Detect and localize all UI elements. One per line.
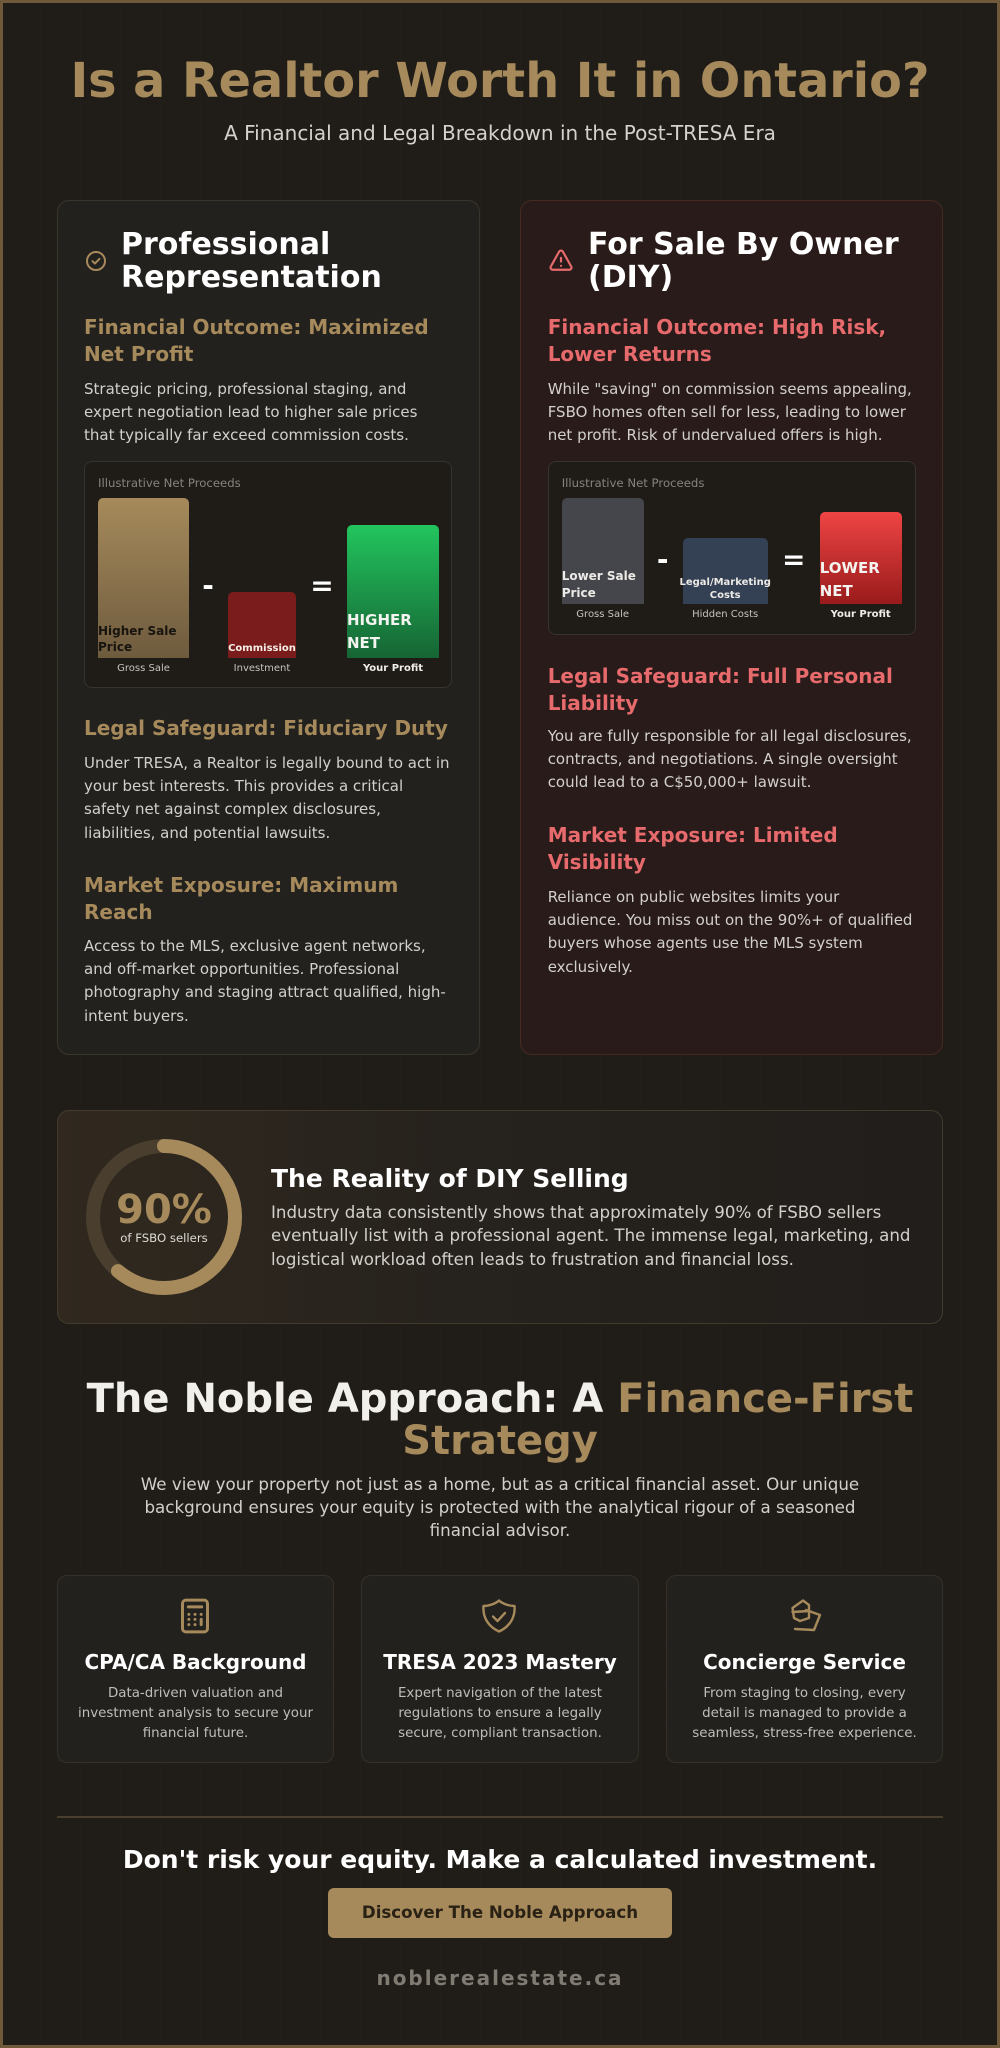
card title: Concierge Service — [703, 1650, 906, 1674]
text: financial outcome: While "saving" on commission seems appealing, — [548, 380, 912, 398]
chart title: Illustrative Net Proceeds — [98, 476, 241, 490]
text: legal safeguard: contracts, and negotiations. A single oversight — [548, 750, 898, 768]
call to action button — [328, 1888, 672, 1938]
panel heading — [121, 227, 382, 295]
callout text: logistical workload often leads to frustration and financial loss. — [271, 1250, 794, 1269]
panel: for sale by owner — [520, 200, 943, 1055]
subheading: financial outcome: Financial Outcome: High Risk, — [548, 314, 886, 338]
card text — [78, 1686, 313, 1740]
card text: Expert navigation of the latest — [398, 1686, 602, 1700]
text: market exposure: exclusively. — [548, 958, 633, 976]
section intro text: background ensures your equity is protected with the analytical rigour of a seasoned — [144, 1497, 856, 1517]
call to action button: Discover The Noble Approach — [362, 1903, 638, 1922]
bar label: Price — [98, 640, 132, 654]
text: legal safeguard: You are fully responsible for all legal disclosures, — [548, 726, 912, 744]
stat caption: of FSBO sellers — [120, 1231, 208, 1245]
section heading: noble approach — [86, 1376, 913, 1464]
card: concierge service — [666, 1575, 943, 1763]
icon: shield check — [482, 1599, 516, 1633]
title: Is a Realtor Worth It in Ontario? — [70, 54, 930, 109]
card title: TRESA 2023 Mastery — [383, 1650, 617, 1674]
panel heading: For Sale By Owner — [588, 227, 899, 262]
bar label: LOWER — [820, 559, 880, 577]
subheading: legal safeguard: Liability — [548, 690, 638, 714]
subheading: legal safeguard — [548, 664, 893, 714]
section intro text: financial advisor. — [430, 1520, 570, 1540]
text: legal safeguard: safety net against complex disclosures, — [84, 800, 381, 818]
panel: reality of DIY selling callout — [57, 1110, 943, 1324]
subheading: market exposure — [548, 822, 838, 874]
callout text: eventually list with a professional agent. The immense legal, marketing, and — [271, 1226, 910, 1245]
text: legal safeguard: your best interests. This provides a critical — [84, 777, 403, 795]
card text: secure, compliant transaction. — [398, 1726, 602, 1740]
bar label: Higher Sale — [98, 624, 177, 638]
text: legal safeguard — [548, 726, 912, 791]
text: market exposure — [548, 888, 912, 976]
panel heading: Representation — [121, 260, 382, 295]
panel: professional representation — [57, 200, 480, 1055]
bar: hidden costs — [683, 538, 768, 604]
text: financial outcome: expert negotiation lead to higher sale prices — [84, 403, 417, 421]
section heading: noble approach: Strategy — [402, 1418, 598, 1464]
text: legal safeguard — [84, 754, 450, 842]
bar label: Lower Sale — [562, 569, 636, 583]
text: market exposure: buyers whose agents use the MLS system — [548, 934, 863, 952]
card text: detail is managed to provide a — [702, 1706, 907, 1720]
panel heading: Professional — [121, 227, 330, 262]
subheading: market exposure — [84, 872, 398, 924]
icon: check circle — [86, 251, 106, 271]
bar label: Legal/Marketing — [679, 577, 771, 588]
website: noblerealestate.ca — [376, 1966, 624, 1990]
bar: gross sale — [98, 498, 189, 658]
icon: hand — [791, 1599, 822, 1632]
bar: commission — [228, 592, 296, 658]
caption: investment: Investment — [234, 663, 290, 674]
text: financial outcome — [84, 380, 417, 444]
panel heading: (DIY) — [588, 260, 673, 295]
text: financial outcome — [548, 380, 912, 444]
bar: gross sale — [562, 498, 644, 604]
caption: gross sale: Gross Sale — [576, 609, 629, 620]
text: market exposure: and off-market opportunities. Professional — [84, 960, 399, 978]
card text: Data-driven valuation and — [108, 1686, 283, 1700]
call to action heading: Don't risk your equity. Make a calculated investment. — [123, 1844, 877, 1874]
subheading: financial outcome: Financial Outcome: Maximized — [84, 314, 429, 338]
subheading: market exposure: Reach — [84, 900, 153, 924]
subheading: legal safeguard: Legal Safeguard: Full Personal — [548, 664, 893, 688]
card text: financial future. — [143, 1726, 248, 1740]
subheading: legal safeguard: Legal Safeguard: Fiduciary Duty — [84, 716, 448, 740]
card: TRESA mastery — [361, 1575, 639, 1763]
section intro text — [141, 1474, 859, 1540]
bar: your profit — [820, 512, 902, 604]
bar label: Commission — [228, 643, 296, 654]
callout text — [271, 1203, 910, 1269]
subheading: financial outcome: Net Profit — [84, 342, 193, 366]
subheading: market exposure: Visibility — [548, 850, 646, 874]
bar label: NET — [820, 582, 853, 600]
section intro text: We view your property not just as a home, but as a critical financial asset. Our unique — [141, 1474, 859, 1494]
bar label — [820, 559, 880, 600]
donut chart: 90% — [86, 1139, 242, 1295]
text: market exposure — [84, 936, 446, 1025]
operator: minus: - — [202, 569, 214, 602]
subheading: market exposure: Market Exposure: Limited — [548, 822, 838, 846]
caption: gross sale: Gross Sale — [117, 663, 170, 674]
bar label: HIGHER — [347, 611, 412, 629]
chart: net proceeds for FSBO — [548, 461, 916, 635]
bar label: NET — [347, 634, 380, 652]
caption: your profit: Your Profit — [831, 609, 891, 620]
bar label — [679, 577, 771, 601]
text: financial outcome: FSBO homes often sell for less, leading to lower — [548, 403, 906, 421]
chart title: Illustrative Net Proceeds — [562, 476, 704, 490]
operator: minus: - — [657, 543, 668, 576]
text: legal safeguard: Under TRESA, a Realtor is legally bound to act in — [84, 754, 450, 772]
card text — [398, 1686, 602, 1740]
subheading: market exposure: Market Exposure: Maximum — [84, 872, 398, 896]
callout heading: The Reality of DIY Selling — [271, 1164, 629, 1193]
card text: From staging to closing, every — [703, 1686, 906, 1700]
bar label — [347, 611, 412, 652]
icon: warning triangle — [549, 250, 573, 271]
text: market exposure: photography and staging attract qualified, high- — [84, 983, 446, 1001]
bar label — [98, 624, 177, 654]
text: legal safeguard: could lead to a C$50,000+ lawsuit. — [548, 773, 811, 791]
text: financial outcome: Strategic pricing, professional staging, and — [84, 380, 406, 398]
text: legal safeguard: liabilities, and potential lawsuits. — [84, 824, 330, 842]
bar label: Costs — [710, 590, 741, 601]
subtitle: A Financial and Legal Breakdown in the Post-TRESA Era — [224, 121, 776, 145]
subheading: financial outcome: Lower Returns — [548, 342, 712, 366]
card text: investment analysis to secure your — [78, 1706, 313, 1720]
stat: 90%: 90% — [116, 1187, 212, 1233]
subheading: financial outcome — [84, 314, 429, 366]
caption: hidden costs: Hidden Costs — [692, 609, 758, 620]
card title: CPA/CA Background — [84, 1650, 306, 1674]
callout text: Industry data consistently shows that approximately 90% of FSBO sellers — [271, 1203, 881, 1222]
text: market exposure: audience. You miss out on the 90%+ of qualified — [548, 911, 912, 929]
section heading: noble approach: The Noble Approach: A Finance-First — [87, 1376, 913, 1422]
bar label: Price — [562, 586, 596, 600]
card text — [692, 1686, 917, 1740]
bar: your profit — [347, 525, 439, 658]
card: CPA/CA background — [57, 1575, 334, 1763]
text: market exposure: intent buyers. — [84, 1007, 189, 1025]
bar label — [562, 569, 636, 600]
card text: regulations to ensure a legally — [398, 1706, 602, 1720]
icon: calculator — [181, 1598, 209, 1634]
subheading: financial outcome — [548, 314, 886, 366]
text: financial outcome: that typically far exceed commission costs. — [84, 426, 409, 444]
text: financial outcome: net profit. Risk of undervalued offers is high. — [548, 426, 882, 444]
card text: seamless, stress-free experience. — [692, 1726, 917, 1740]
operator: equals: = — [782, 543, 805, 576]
caption: your profit: Your Profit — [363, 663, 423, 674]
operator: equals: = — [310, 569, 334, 602]
text: market exposure: Reliance on public websites limits your — [548, 888, 839, 906]
text: market exposure: Access to the MLS, exclusive agent networks, — [84, 936, 426, 954]
panel heading — [588, 227, 899, 295]
chart: net proceeds with realtor — [84, 461, 452, 688]
